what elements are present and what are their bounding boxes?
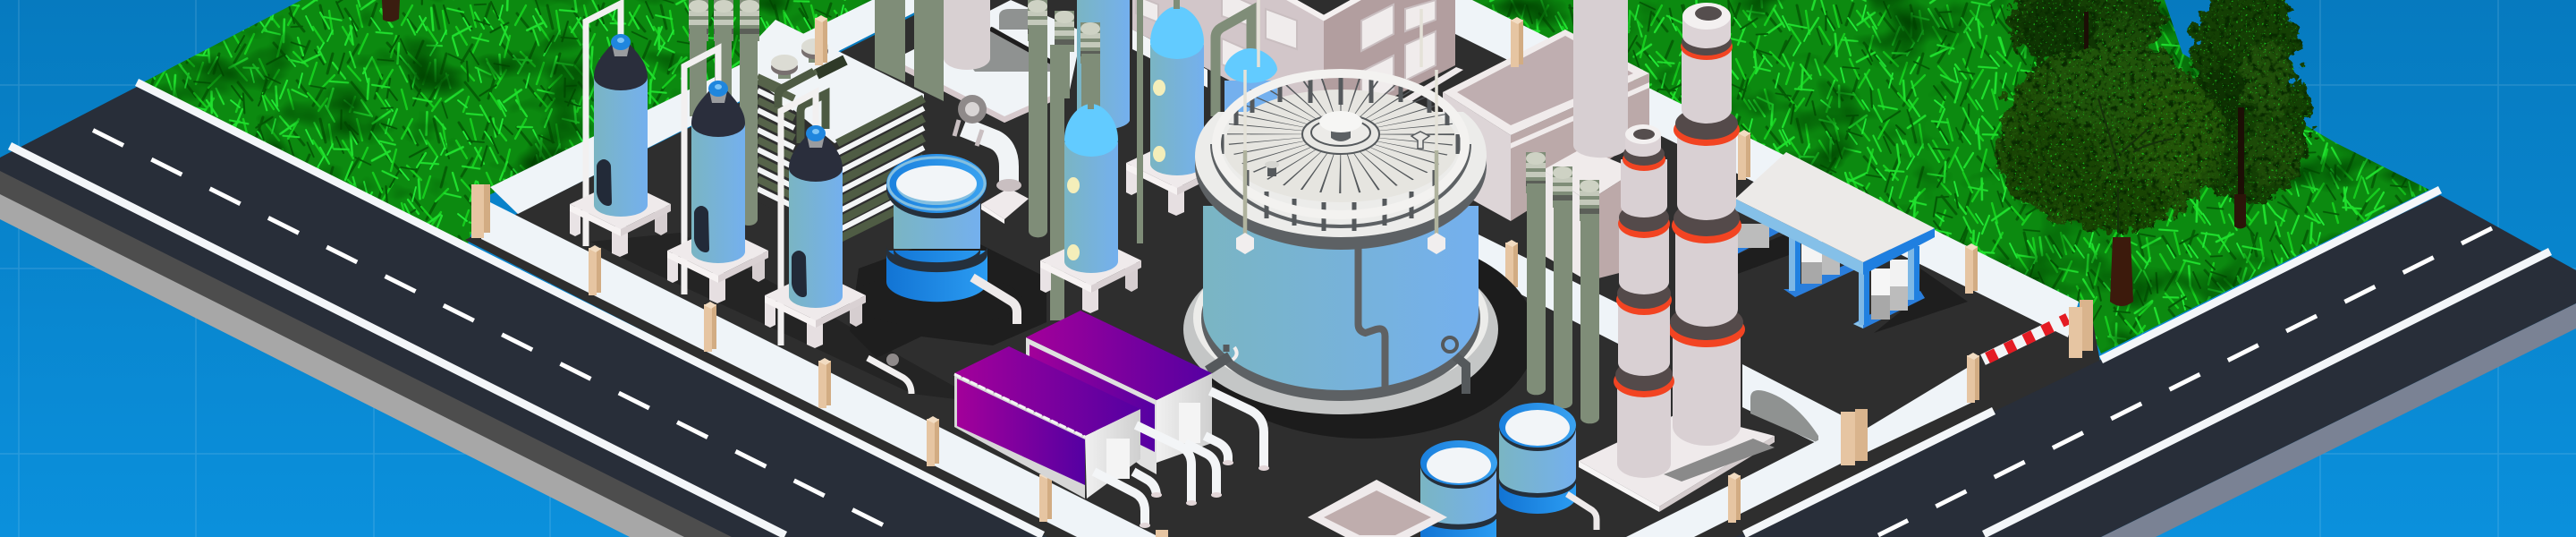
fence posts [471, 15, 1978, 537]
tank: main storage [1183, 0, 1536, 439]
canopy station [1735, 152, 1935, 328]
column G: back blue [1077, 0, 1130, 130]
pipe flange caps [1140, 460, 1269, 528]
unit front [954, 346, 1140, 499]
canopy supply boxes [1738, 224, 1908, 320]
roof spokes [1265, 95, 1417, 174]
roof hoop rail [1216, 73, 1465, 215]
column: left dark dome 2 [691, 81, 745, 263]
tower platform [1579, 412, 1775, 512]
column H: small dome [1224, 48, 1277, 116]
table: left column 2 [667, 226, 768, 303]
table: column E [1040, 236, 1141, 313]
floor shadows [590, 233, 1968, 403]
tower A: tall stack [1668, 3, 1745, 446]
back platform and chimney [905, 0, 1082, 123]
green pipes: top left [689, 0, 759, 226]
back walls [490, 0, 2079, 337]
column: left dark dome 1 [594, 34, 648, 217]
building: chimney block [1543, 0, 1637, 281]
wall valve [868, 354, 911, 394]
small roof box [1308, 480, 1447, 537]
tree: right [2187, 0, 2312, 229]
tank: large blue left [852, 154, 1021, 327]
roof hub [1302, 111, 1379, 154]
tree: back [2009, 0, 2163, 76]
tree trunk at top edge [382, 0, 400, 21]
table: left column 3 [765, 271, 866, 348]
road: right [1735, 190, 2576, 537]
purple units [954, 311, 1269, 528]
column E: blue tall front [1064, 97, 1118, 273]
road: left [0, 82, 1046, 537]
pipes along wall behind fence [586, 4, 816, 345]
canopy roof [1735, 152, 1935, 275]
tank base ring [1183, 236, 1498, 414]
roof small vents [1265, 132, 1429, 176]
tank floor shadow [1192, 233, 1536, 439]
barrier gate [1983, 300, 2093, 360]
green pipes: mid cluster [1028, 0, 1251, 320]
table: left column 1 [570, 180, 671, 257]
front-left wall [481, 198, 1159, 537]
canopy legs [1789, 234, 1919, 325]
tree: front large [1996, 42, 2225, 306]
unit back [1026, 311, 1212, 474]
tower B: short stack [1614, 124, 1674, 478]
building: back office [1129, 0, 1463, 132]
building: right annex with roof [1443, 30, 1649, 221]
tank roof skirt [1195, 90, 1487, 250]
exchanger stack [758, 20, 924, 242]
green pipes: right trio [1526, 152, 1599, 423]
roof railings [1222, 76, 1458, 231]
table: column F [1126, 139, 1227, 216]
plant floor: asphalt [465, 0, 2101, 537]
tank: small blue C [1499, 403, 1597, 530]
tank: small blue D [1420, 440, 1497, 537]
guide rods [1236, 0, 1445, 254]
front-right walls [1626, 353, 1979, 537]
grass lawn: left [143, 0, 872, 252]
column F: blue tall [1150, 0, 1204, 175]
column: left dark dome 3 [789, 125, 843, 308]
wall: mid right [1479, 234, 1620, 345]
tank side pipe [1358, 245, 1385, 390]
unit white pipes [1094, 391, 1264, 525]
tank valves [1208, 337, 1466, 394]
valve and elbow pipe [954, 95, 1029, 224]
post: mid right wall [1505, 240, 1518, 290]
canopy blue frames [1735, 221, 1925, 328]
grass lawn: right [1467, 0, 2429, 354]
green pipes: thick pair [875, 0, 944, 101]
tank body [1203, 206, 1479, 390]
right arch wall [1742, 364, 1843, 456]
